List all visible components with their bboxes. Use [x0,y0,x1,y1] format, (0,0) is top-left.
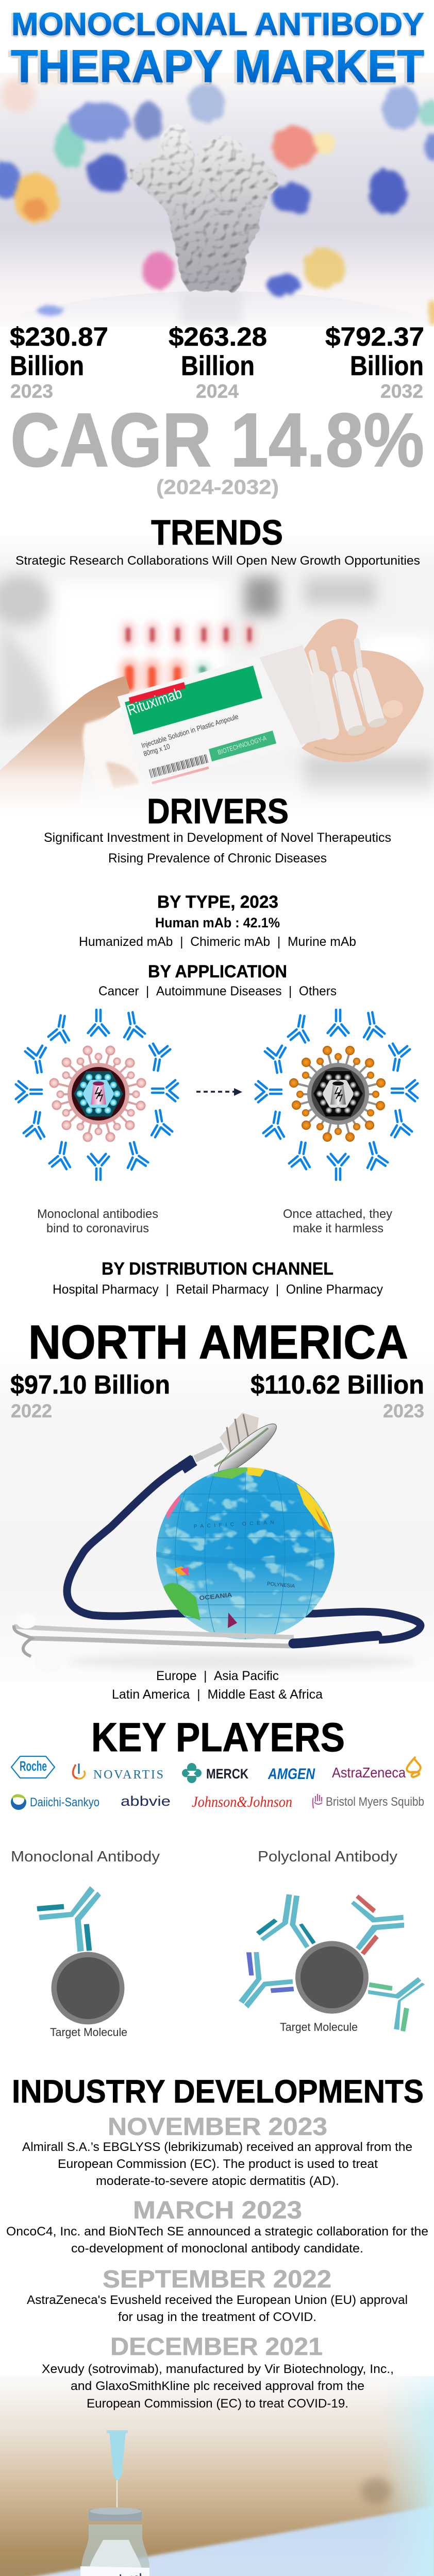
caption: made harmless: make it harmless [293,1222,383,1235]
other regions [112,1669,323,1702]
icon: coronavirus surrounded by antibodies [16,1010,178,1180]
market value 2023 [10,322,108,402]
icon: globe: PACIFIC OCEAN [194,1520,274,1530]
market value 2032: $792.37 [325,322,424,351]
panel: globe and stethoscope photo [0,1409,434,1672]
development: December 2021: and GlaxoSmithKline plc received approval from the [71,2379,364,2393]
market value 2024: 2024 [196,381,239,402]
development: March 2023: OncoC4, Inc. and BioNTech SE announced a strategic collaboration for the [6,2225,428,2239]
driver two: Rising Prevalence of Chronic Diseases [108,851,327,866]
logo: Roche [11,1756,55,1778]
icon: medicine box: BIOTECHNOLOGY-A [216,734,268,756]
title: MONOCLONAL ANTIBODY [11,7,424,42]
logo: Merck [182,1763,248,1783]
development: December 2021 [42,2333,394,2411]
icon: medicine box: Injectable Solution in Plastic Ampoule [140,712,239,750]
icon: globe [156,1467,335,1639]
logo: Merck: MERCK [206,1766,248,1782]
development: March 2023 [6,2197,428,2256]
market value 2024: Billion [181,351,255,381]
title: THERAPY MARKET [11,40,424,92]
driver one: Significant Investment in Development of Novel Therapeutics [44,831,391,845]
logo: AbbVie: abbvie [121,1793,171,1809]
title: MONOCLONAL ANTIBODY [10,7,423,43]
icon: central grey protein [127,124,278,292]
north america 2022 value [10,1370,170,1421]
application list: Cancer | Autoimmune Diseases | Others [98,984,337,998]
north america 2022 value: 2022 [11,1400,52,1421]
heading: key players: KEY PLAYERS [91,1714,345,1760]
logo: Novartis: NOVARTIS [93,1768,163,1782]
development: September 2022: AstraZeneca's Evusheld received the European Union (EU) approval [27,2293,408,2307]
heading: by application: BY APPLICATION [148,962,287,981]
label: monoclonal antibody: Monoclonal Antibody [11,1849,160,1865]
title: THERAPY MARKET [8,41,422,93]
market value 2032: Billion [350,351,424,381]
heading: drivers: DRIVERS [147,791,289,831]
diagram: monoclonal antibody binding target molecule [37,1886,127,2039]
logo: Daiichi-Sankyo: Daiichi-Sankyo [30,1795,99,1809]
development: December 2021: European Commission (EC) to treat COVID-19. [87,2397,348,2411]
other regions: Latin America | Middle East & Africa [112,1687,323,1702]
logo: Roche: Roche [20,1758,47,1774]
market value 2032: 2032 [380,381,423,402]
heading: trends: TRENDS [151,513,283,552]
north america 2022 value: $97.10 Billion [10,1370,170,1399]
development: September 2022 [27,2266,408,2324]
north america 2023 value: 2023 [383,1400,424,1421]
development: December 2021: Xevudy (sotrovimab), manufactured by Vir Biotechnology, Inc., [42,2362,394,2376]
development: December 2021: DECEMBER 2021 [110,2333,323,2361]
panel: vial and syringe photo [0,2376,434,2576]
distribution list: Hospital Pharmacy | Retail Pharmacy | Online Pharmacy [53,1282,383,1297]
heading: by distribution channel: BY DISTRIBUTION CHANNEL [102,1259,333,1279]
diagram: polyclonal antibodies binding target molecule [239,1894,425,2033]
development: November 2023 [22,2113,412,2188]
other regions: Europe | Asia Pacific [156,1669,279,1683]
icon: stethoscope tube back [67,1459,421,1640]
north america 2023 value [251,1370,424,1421]
icon: globe: OCEANIA [199,1591,232,1602]
human mab share: Human mAb : 42.1% [155,915,280,930]
development: November 2023: Almirall S.A.’s EBGLYSS (lebrikizumab) received an approval from the [22,2140,412,2154]
diagram: monoclonal antibody binding target molecule: Target Molecule [50,2026,127,2039]
market value 2024 [169,322,267,402]
caption: made harmless: Once attached, they [283,1207,392,1221]
development: November 2023: moderate-to-severe atopic dermatitis (AD). [96,2174,339,2188]
development: March 2023: co-development of monoclonal antibody candidate. [71,2242,363,2256]
icon: stethoscope binaurals [14,1613,377,1673]
icon: medicine box: 80mg x 10 [142,742,171,758]
logo: AstraZeneca: AstraZeneca [332,1765,406,1781]
development: November 2023: NOVEMBER 2023 [108,2113,327,2141]
caption: antibodies bind: Monoclonal antibodies [37,1207,158,1221]
icon: chest piece [195,1413,282,1480]
logo: AstraZeneca [332,1757,421,1781]
icon: ampoule tray [258,641,388,745]
logo: Johnson and Johnson: Johnson&Johnson [192,1793,292,1810]
icon: medicine box: Rituximab [125,685,184,719]
title: THERAPY MARKET [11,42,424,94]
arrow [196,1088,242,1096]
market value 2023: 2023 [10,381,53,402]
icon: right hand [302,619,424,762]
market value 2032 [325,322,424,402]
title [8,7,424,94]
heading: north america: NORTH AMERICA [28,1315,408,1369]
development: September 2022: for usag in the treatment of COVID. [118,2310,316,2324]
CAGR period: (2024-2032) [156,476,279,499]
logo: Daiichi-Sankyo [11,1794,99,1810]
market value 2023: $230.87 [10,322,108,351]
panel: trends photo of ampoule box [0,557,434,801]
market value 2024: $263.28 [169,322,267,351]
logo: Amgen: AMGEN [268,1766,315,1783]
icon: neutralised coronavirus surrounded by antibodies [256,1010,418,1180]
caption: made harmless [283,1207,392,1235]
type list: Humanized mAb | Chimeric mAb | Murine mAb [79,935,356,949]
market value 2023: Billion [10,351,84,381]
diagram: polyclonal antibodies binding target molecule: Target Molecule [280,2021,358,2033]
icon: medicine box [118,656,302,787]
heading: by type: BY TYPE, 2023 [157,892,278,912]
development: September 2022: SEPTEMBER 2022 [103,2266,331,2293]
logo: Novartis [73,1764,163,1782]
label: polyclonal antibody: Polyclonal Antibody [258,1849,398,1865]
icon: vial [80,2430,149,2576]
development: March 2023: MARCH 2023 [133,2197,302,2224]
caption: antibodies bind: bind to coronavirus [46,1222,149,1235]
north america 2023 value: $110.62 Billion [251,1370,424,1399]
panel: hero image with protein molecules [0,73,434,327]
development: November 2023: European Commission (EC). The product is used to treat [58,2157,378,2171]
caption: antibodies bind [37,1207,158,1235]
title: MONOCLONAL ANTIBODY [11,8,424,44]
icon: globe: POLYNESIA [267,1581,295,1589]
icon: left hand [0,676,130,791]
trends description: Strategic Research Collaborations Will Open New Growth Opportunities [15,554,420,568]
